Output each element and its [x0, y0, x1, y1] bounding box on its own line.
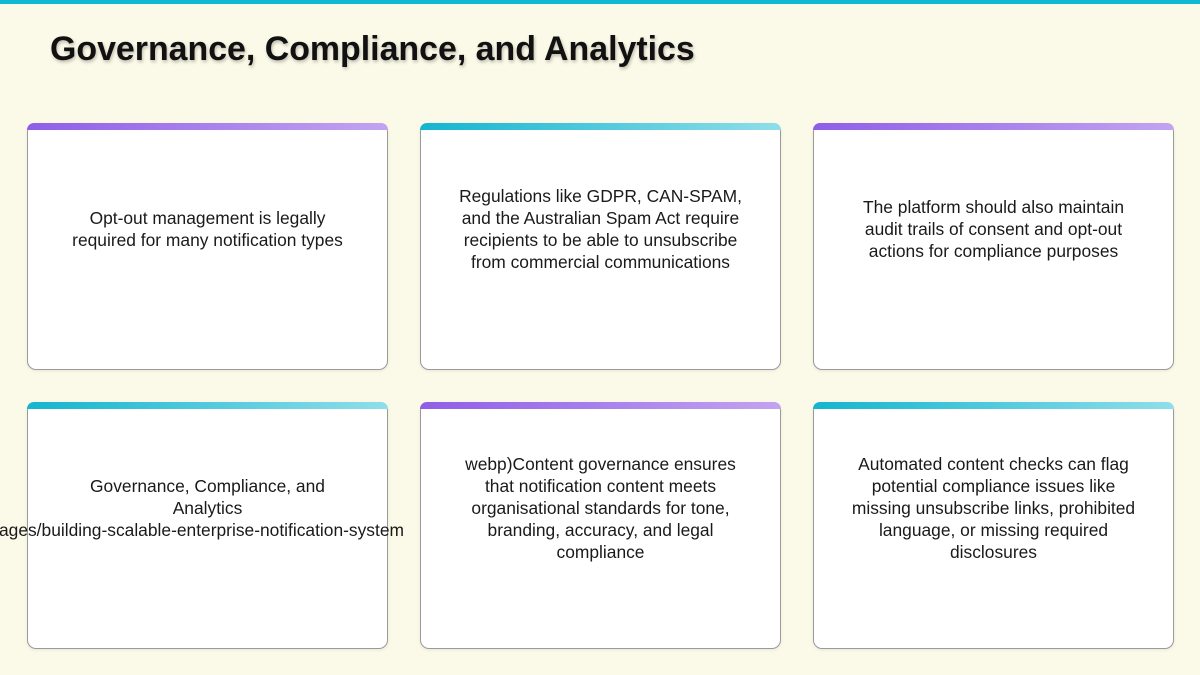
card 5: [420, 402, 781, 649]
card 4: Governance, Compliance, and: [90, 476, 325, 496]
card 4: Analytics: [173, 498, 242, 518]
card 3: The platform should also maintain audit trails of consent and opt-out actions for compliance purposes: [863, 196, 1124, 260]
card 1: Opt-out management is legally required for many notification types: [72, 208, 343, 250]
card 4: [27, 402, 388, 649]
card 1: [27, 123, 388, 370]
card 3: [813, 123, 1174, 370]
card 4: ages/building-scalable-enterprise-notification-system: [0, 520, 404, 540]
card 2: [420, 123, 781, 370]
card 6: [813, 402, 1174, 649]
card 6: Automated content checks can flag potential compliance issues like missing unsubscribe links, prohibited language, or missing required disclosures: [852, 454, 1135, 562]
title: Governance, Compliance, and Analytics: [50, 30, 695, 68]
card 5: webp)Content governance ensures that notification content meets organisational standards for tone, branding, accuracy, and legal compliance: [465, 454, 736, 562]
card 2: Regulations like GDPR, CAN-SPAM, and the Australian Spam Act require recipients to be able to unsubscribe from commercial communications: [459, 186, 742, 272]
